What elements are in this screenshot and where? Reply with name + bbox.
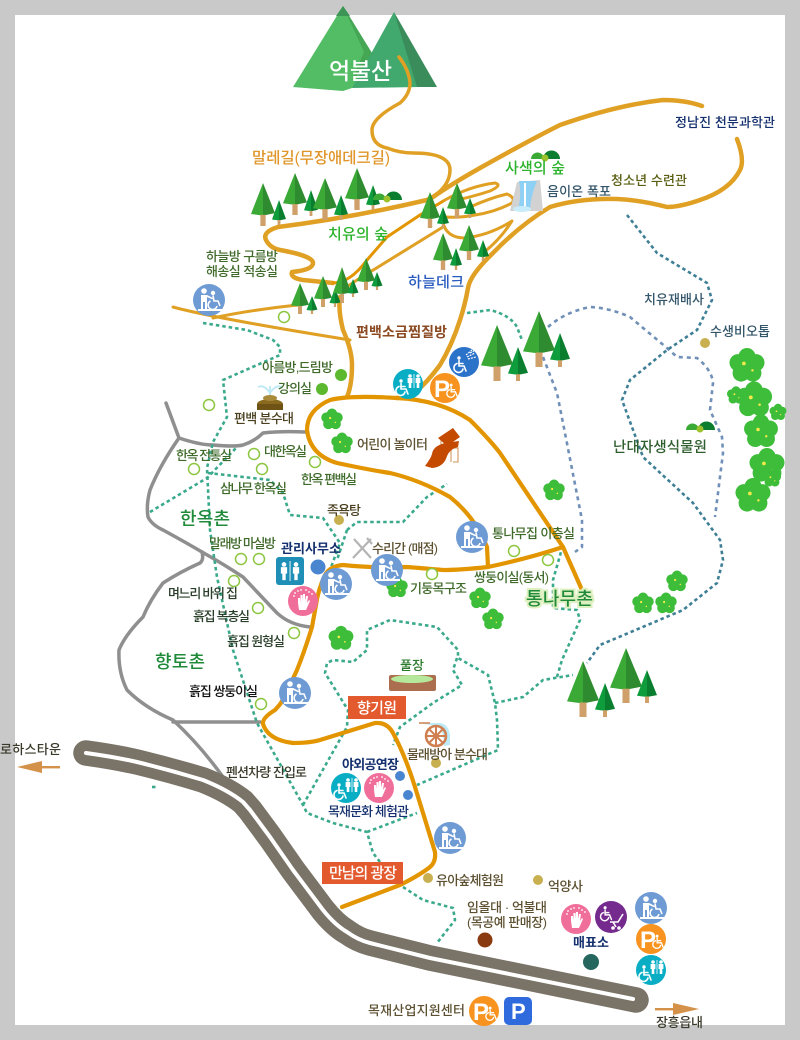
icon: waterfall 음이온 폭포	[510, 180, 543, 212]
icon: accessible parking near 목재산업지원센터: P	[473, 999, 489, 1026]
text: 풀장: 풀장	[400, 658, 424, 673]
icon: hill at 난대자생식물원	[686, 422, 715, 432]
icon: accessible parking near 매표소	[636, 924, 666, 954]
icons: helper accessible facilities	[193, 284, 667, 924]
icon: accessible parking near 매표소: P	[640, 927, 656, 954]
icon: accessible parking near 편백소금찜질방: P	[434, 376, 450, 403]
open circle markers: lodging	[188, 312, 554, 710]
icon: restroom sign at 관리사무소	[276, 557, 304, 585]
mountain: 억불산: 억불산	[329, 58, 392, 84]
text: 사색의 숲: 사색의 숲	[505, 160, 565, 177]
text: 매표소: 매표소	[573, 935, 609, 950]
icon: fork and knife	[353, 538, 372, 558]
label: 만남의 광장	[322, 862, 403, 884]
text: 며느리 바위 집: 며느리 바위 집	[168, 586, 238, 601]
text: 하늘방 구름방 해송실 적송실	[206, 249, 278, 279]
text: 치유재배사: 치유재배사	[644, 292, 704, 307]
text: 임올대 억불대 목공예 판매장	[467, 900, 547, 930]
mountain: 억불산	[293, 6, 437, 91]
text: 목재문화 체험관: 목재문화 체험관	[328, 804, 409, 819]
icon: parking sign	[504, 997, 532, 1025]
text: 하늘데크: 하늘데크	[408, 274, 464, 291]
trees: 사색의 숲	[420, 183, 489, 270]
icons: accessible restrooms	[331, 369, 666, 985]
text: 청소년 수련관: 청소년 수련관	[611, 173, 687, 188]
text: 치유의 숲: 치유의 숲	[328, 226, 388, 243]
text: 하늘방 구름방 해송실 적송실: 하늘방 구름방	[206, 249, 278, 264]
icon: accessible shower	[449, 347, 479, 377]
heading: 향토촌: 향토촌	[155, 652, 205, 672]
text: 물래방아 분수대: 물래방아 분수대	[407, 747, 488, 762]
main trails: lower loop	[263, 397, 582, 907]
text: 임올대 억불대 목공예 판매장: 임올대 · 억불대	[467, 900, 547, 915]
gray road paths: 한옥촌, 향토촌	[119, 403, 310, 777]
text: 유아숲체험원: 유아숲체험원	[436, 873, 504, 888]
text: 통나무집 이층실: 통나무집 이층실	[492, 526, 575, 541]
text: 관리사무소: 관리사무소	[281, 541, 341, 556]
arrow: to 로하스타운	[17, 761, 60, 773]
text: 편백 분수대: 편백 분수대	[234, 411, 294, 426]
text: 난대자생식물원: 난대자생식물원	[613, 439, 707, 456]
text: 쌍둥이실(동서): 쌍둥이실(동서)	[474, 570, 549, 585]
dashed trails: forest walks	[150, 215, 723, 943]
label: 향기원	[348, 696, 406, 719]
text: 강의실: 강의실	[278, 381, 312, 396]
text: 억양사: 억양사	[548, 879, 583, 894]
text: 말래방 마실방: 말래방 마실방	[209, 536, 276, 551]
arrow: to 장흥읍내	[655, 1003, 699, 1015]
text: 야외공연장: 야외공연장	[342, 757, 399, 772]
icon: playground slide	[425, 428, 460, 468]
icon: water wheel 물래방아	[419, 723, 450, 746]
text: 흙집 원형실: 흙집 원형실	[227, 634, 285, 649]
text: 음이온 폭포: 음이온 폭포	[547, 184, 611, 199]
heading: 통나무촌: 통나무촌	[526, 589, 593, 609]
icon: fountain 편백 분수대	[257, 386, 283, 410]
text: 아름방,드림방: 아름방,드림방	[262, 360, 333, 375]
icons: braille hand	[288, 586, 591, 934]
label: 향기원: 향기원	[357, 700, 397, 717]
text: 정남진 천문과학관: 정남진 천문과학관	[675, 115, 775, 130]
text: 수리간 (매점): 수리간 (매점)	[372, 541, 438, 556]
icon: accessible parking near 목재산업지원센터	[469, 996, 499, 1026]
text: 삼나무 한옥실: 삼나무 한옥실	[220, 481, 287, 496]
text: 한옥 전통실: 한옥 전통실	[176, 448, 232, 463]
text: 대한옥실: 대한옥실	[264, 444, 307, 459]
icon: wheelchair and stroller	[595, 901, 627, 933]
trees: 치유의 숲	[291, 258, 382, 314]
bushes	[321, 348, 786, 650]
text: 장흥읍내: 장흥읍내	[656, 1015, 703, 1030]
text: 수생비오톱: 수생비오톱	[710, 324, 770, 339]
text: 목재산업지원센터: 목재산업지원센터	[368, 1003, 465, 1018]
vehicle road	[86, 753, 636, 1000]
trees: 말레길 forest	[251, 168, 380, 226]
icon: hill near 말레길	[373, 192, 402, 202]
text: 한옥 편백실: 한옥 편백실	[301, 472, 357, 487]
text: 어린이 놀이터: 어린이 놀이터	[357, 437, 428, 452]
icon: accessible parking near 편백소금찜질방	[430, 373, 460, 403]
text: 흙집 복층실: 흙집 복층실	[193, 609, 250, 624]
dot markers	[310, 338, 710, 970]
icon: hill at 사색의 숲	[531, 151, 560, 162]
label: 만남의 광장: 만남의 광장	[329, 865, 397, 882]
text: 로하스타운: 로하스타운	[0, 742, 61, 757]
text: 임올대 억불대 목공예 판매장: (목공예 판매장)	[467, 915, 547, 930]
main trails: 말레길	[173, 57, 742, 398]
text: 말레길: 말레길(무장애데크길)	[252, 149, 390, 167]
trees: 통나무촌 아래	[567, 648, 657, 717]
text: 펜션차량 진입로: 펜션차량 진입로	[226, 765, 307, 780]
icon: parking sign: P	[511, 999, 526, 1024]
icon: pool 풀장	[389, 675, 436, 691]
trees: 하늘데크 아래	[481, 311, 570, 381]
heading: 한옥촌: 한옥촌	[180, 509, 230, 529]
text: 편백소금찜질방: 편백소금찜질방	[356, 324, 447, 340]
text: 흙집 쌍둥이실: 흙집 쌍둥이실	[189, 684, 258, 699]
text: 기둥목구조: 기둥목구조	[410, 581, 467, 596]
text: 하늘방 구름방 해송실 적송실: 해송실 적송실	[206, 264, 278, 279]
text: 족욕탕: 족욕탕	[327, 503, 361, 518]
